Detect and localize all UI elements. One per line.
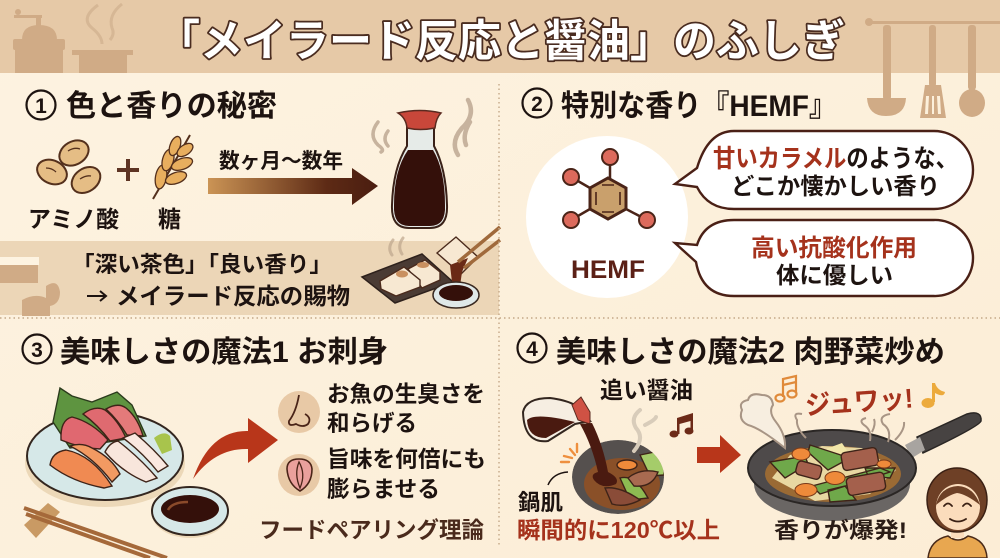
white circle with molecule: [526, 136, 688, 298]
illustration: smiling woman: [927, 468, 987, 558]
illustration: rising steam clouds: [741, 394, 904, 448]
panel: 1 colour and aroma: [0, 90, 500, 316]
illustration: frying pan with stir fry: [748, 413, 981, 521]
heading 2: 特別な香り『HEMF』: [561, 90, 837, 123]
icon: bottle steam: [373, 100, 471, 155]
icon: wheat: [153, 135, 195, 199]
arrow: curved red: [193, 418, 278, 479]
illustration: soy sauce dish: [152, 487, 228, 538]
illustration: chopsticks: [24, 503, 167, 558]
text: sizzle sound: ジュワッ!: [804, 383, 914, 421]
text: softens fishy smell: 和らげる: [327, 411, 417, 436]
text: amplifies umami: 旨味を何倍にも: [327, 447, 486, 472]
label: months to years: 数ヶ月〜数年: [219, 150, 343, 173]
text: softens fishy smell: [327, 382, 485, 436]
heading 4: 4: [526, 338, 538, 361]
panel: 4 stir fry: [517, 334, 987, 558]
text: food pairing theory: フードペアリング理論: [259, 517, 484, 543]
label: HEMF: HEMF: [571, 256, 645, 284]
icon: molecule: [563, 149, 655, 228]
plus sign: [117, 159, 139, 181]
speech bubble: antioxidant: [675, 220, 973, 296]
icon: pan sparks: [561, 444, 577, 462]
heading 2: 2: [531, 93, 543, 116]
label: 120 degrees: 瞬間的に120℃以上: [517, 517, 720, 543]
speech bubble: caramel aroma: 甘いカラメルのような、: [713, 145, 958, 173]
icon: nose: [278, 391, 320, 433]
icon: pot and jug silhouette: [0, 257, 60, 316]
text: gift of the Maillard reaction: メイラード反応の賜物: [116, 283, 350, 309]
icon: tongue / taste: [278, 454, 320, 496]
header band: [0, 0, 1000, 73]
heading 3: 美味しさの魔法1 お刺身: [60, 336, 388, 369]
icon: steaming pot silhouette: [72, 4, 133, 73]
icon: coffee mill silhouette: [13, 9, 65, 73]
text: aroma explodes: 香りが爆発!: [774, 518, 907, 543]
label: sugar: 糖: [158, 206, 181, 232]
panel: 2 special aroma HEMF: [522, 88, 973, 298]
text: amplifies umami: [327, 447, 486, 502]
illustration: sashimi plate: [25, 388, 185, 507]
icon: music note right: [922, 383, 945, 408]
icon: hanging kitchen utensils: [865, 18, 1000, 118]
icon: music note dark: [670, 413, 694, 438]
heading 4: 美味しさの魔法2 肉野菜炒め: [556, 336, 945, 369]
icon: mochi with soy sauce: [362, 227, 500, 308]
icon: pan steam: [634, 410, 656, 451]
speech bubble: antioxidant: 高い抗酸化作用: [751, 235, 917, 262]
label: amino acid: アミノ酸: [28, 206, 119, 232]
title: 「メイラード反応と醤油」のふしぎ: [157, 17, 845, 66]
illustration: soy sauce stream: [580, 423, 617, 486]
speech bubble: caramel aroma: どこか懐かしい香り: [731, 173, 940, 199]
icon: soy sauce bottle: [392, 110, 447, 228]
text: deep brown, good aroma: 「深い茶色」「良い香り」: [72, 252, 332, 277]
label: extra soy sauce: 追い醤油: [600, 377, 693, 403]
icon: pouring bottle: [523, 397, 590, 441]
icon: music note left: [776, 376, 796, 402]
icon: soybeans: [33, 135, 105, 198]
panel: 3 sashimi: [22, 334, 486, 558]
heading 1: 1: [35, 95, 47, 118]
pointer line: [548, 472, 568, 485]
speech bubble: caramel aroma: [675, 131, 973, 209]
label: pan surface: 鍋肌: [518, 490, 563, 515]
arrow: ageing: [208, 168, 378, 205]
speech bubble: antioxidant: 体に優しい: [776, 262, 893, 288]
text: amplifies umami: 膨らませる: [327, 477, 440, 502]
strip: result: [0, 227, 500, 316]
illustration: pan close-up: [572, 440, 664, 514]
heading 3: 3: [31, 339, 43, 362]
heading 1: 色と香りの秘密: [66, 90, 277, 123]
text: softens fishy smell: お魚の生臭さを: [327, 382, 485, 407]
arrow: to stir fry: [697, 435, 741, 473]
